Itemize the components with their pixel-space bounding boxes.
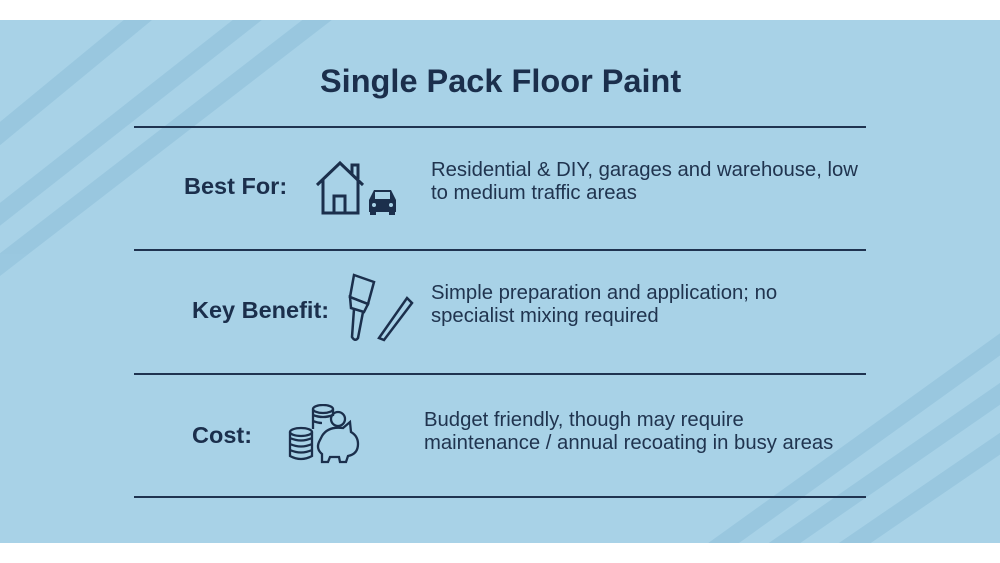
text: best for: to medium traffic areas: [431, 182, 637, 204]
title: Single Pack Floor Paint: [320, 63, 681, 99]
label: best for: Best For:: [184, 173, 287, 199]
icon: house and car: [316, 161, 396, 215]
label: cost: Cost:: [192, 422, 252, 448]
icon: coins and piggy bank: [288, 404, 360, 464]
text: cost: maintenance / annual recoating in busy areas: [424, 432, 833, 454]
text: key benefit: [431, 282, 777, 327]
text: best for: Residential & DIY, garages and warehouse, low: [431, 159, 858, 181]
icon: brush and knife: [348, 273, 414, 342]
text: cost: Budget friendly, though may require: [424, 409, 744, 431]
text: best for: [431, 159, 858, 204]
text: key benefit: specialist mixing required: [431, 305, 659, 327]
label: key benefit: Key Benefit:: [192, 297, 329, 323]
text: cost: [424, 409, 833, 454]
text: key benefit: Simple preparation and application; no: [431, 282, 777, 304]
